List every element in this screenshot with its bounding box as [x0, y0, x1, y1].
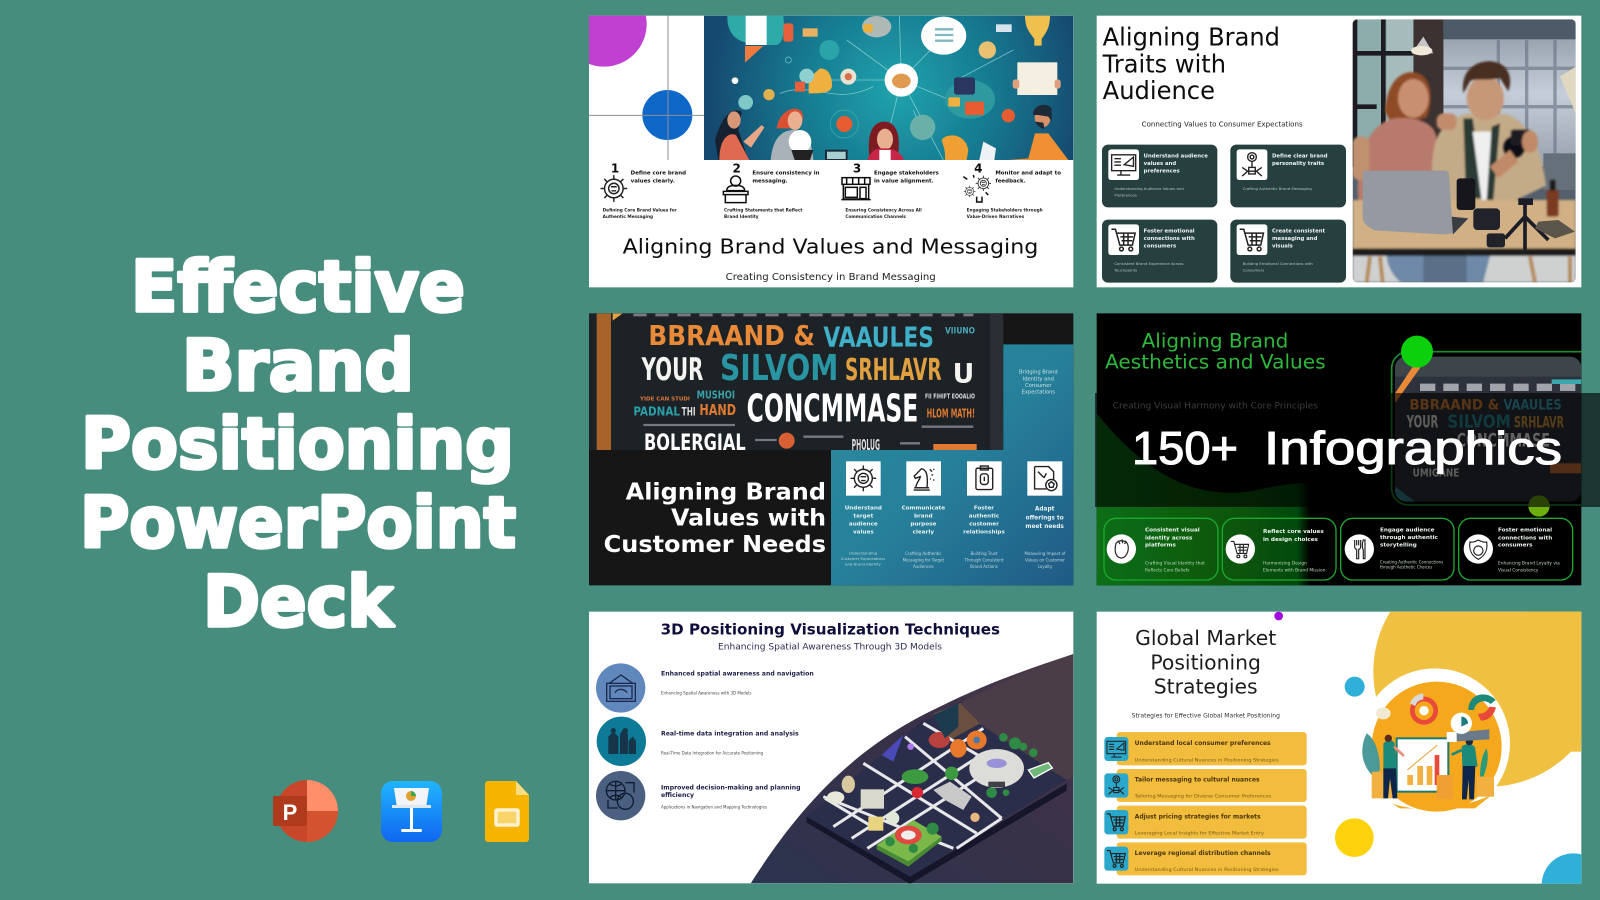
- title: Effective: [131, 246, 465, 328]
- step 4: Engaging Stakeholders through: [967, 208, 1043, 214]
- card: personality traits: [1230, 145, 1346, 207]
- card: emotional connections: [1102, 220, 1217, 283]
- column 4: Measuring Impact of: [1025, 551, 1066, 556]
- row 1: [1104, 732, 1307, 765]
- slide subtitle: Enhancing Spatial Awareness Through 3D Models: [718, 643, 943, 653]
- slide heading: Positioning: [1150, 650, 1261, 674]
- decorative blue dot: [1345, 677, 1365, 697]
- image: chalkboard typography: THI: [682, 405, 696, 419]
- step 4: 4: [974, 161, 983, 175]
- slide heading: Traits with: [1102, 49, 1226, 78]
- teal content panel: Identity and: [1023, 377, 1054, 383]
- column 3: authentic: [969, 514, 999, 520]
- card 2: Reflect core values: [1263, 529, 1324, 535]
- decorative green circle: [1401, 336, 1433, 368]
- teal content panel: Expectations: [1022, 390, 1055, 396]
- slide subtitle: Creating Consistency in Brand Messaging: [726, 272, 936, 283]
- column 4: Values on Customer: [1025, 558, 1065, 563]
- panel: Global Market Positioning Strategies: [1096, 612, 1582, 884]
- card: audience values: Understanding Audience Values and: [1114, 186, 1184, 191]
- donut charts: [1412, 699, 1436, 722]
- card 4: Foster emotional: [1498, 528, 1552, 534]
- decorative yellow dot: [1335, 818, 1374, 857]
- slide heading: Global Market: [1135, 626, 1276, 650]
- table: [1353, 200, 1576, 252]
- column 2: Audiences: [913, 564, 934, 569]
- card 1: platforms: [1145, 543, 1177, 549]
- row 3: [1104, 806, 1307, 839]
- panel: Aligning Brand Values with Customer Needs: [589, 313, 1073, 585]
- card: emotional connections: Touchpoints: [1113, 267, 1137, 272]
- image: chalkboard typography: PADNAL: [633, 405, 680, 419]
- column 4: Loyalty: [1038, 564, 1053, 569]
- image: chalkboard typography: HAND: [699, 401, 736, 419]
- slide heading: Aligning Brand: [1142, 329, 1288, 352]
- card: audience values: preferences: [1144, 169, 1180, 175]
- row 2: Tailoring Messaging for Diverse Consumer Preferences: [1134, 794, 1272, 800]
- column 2: brand: [914, 514, 933, 520]
- slide heading: [1105, 329, 1326, 373]
- faint slide subtitle: Creating Visual Harmony with Core Principles: [1113, 402, 1318, 412]
- card: emotional connections: Consistent Brand Experience Across: [1114, 261, 1183, 266]
- slide heading: 3D Positioning Visualization Techniques: [661, 620, 1000, 638]
- card: personality traits: Crafting Authentic Brand Messaging: [1243, 186, 1312, 191]
- card 4: [1459, 518, 1573, 580]
- card: audience values: Preferences: [1114, 192, 1137, 197]
- slide heading: [604, 477, 826, 558]
- image frame: CONCMMASE: [1457, 431, 1550, 452]
- icon: Keynote: [381, 781, 442, 842]
- cameras and tripod: [1457, 178, 1475, 210]
- card: emotional connections: connections with: [1144, 236, 1195, 242]
- title: Deck: [203, 561, 394, 643]
- slide subtitle: Connecting Values to Consumer Expectations: [1142, 119, 1303, 128]
- step 1: [600, 161, 686, 220]
- panel: Aligning Brand Aesthetics and Values: [1097, 313, 1600, 585]
- slide heading: Aligning Brand: [626, 477, 826, 505]
- card: audience values: values and: [1144, 161, 1176, 167]
- title: Positioning: [81, 403, 514, 485]
- slide heading: Customer Needs: [604, 530, 826, 558]
- step 3: Ensuring Consistency Across All: [845, 208, 922, 214]
- step 2: [723, 161, 820, 220]
- slide heading: Strategies: [1154, 675, 1258, 699]
- image: chalkboard typography: YOUR: [641, 352, 703, 388]
- icon: Google Slides: [485, 781, 529, 842]
- card: audience values: [1102, 145, 1217, 207]
- card 3: Creating Authentic Connections: [1380, 559, 1443, 564]
- step 3: in value alignment.: [874, 179, 934, 185]
- column 2: Communicate: [902, 506, 945, 512]
- image: chalkboard typography: VIIUNO: [945, 326, 975, 336]
- card 2: in design choices: [1263, 537, 1319, 543]
- plant: [1480, 748, 1488, 777]
- item 2: Real-Time Data Integration for Accurate Positioning: [661, 750, 763, 755]
- card 2: Elements with Brand Mission: [1263, 568, 1326, 574]
- decorative purple circle: [589, 16, 647, 67]
- card: consistent messaging: Consumers: [1243, 267, 1264, 272]
- row 1: Understanding Cultural Nuances in Positioning Strategies: [1135, 757, 1279, 763]
- decorative shapes: [1373, 612, 1582, 884]
- item 3: [596, 771, 801, 820]
- step 1: 1: [611, 161, 619, 175]
- card 4: Visual Consistency: [1498, 568, 1539, 574]
- column 1: Understanding: [849, 550, 878, 555]
- column 2: clearly: [913, 529, 934, 535]
- card 3: Engage audience: [1380, 528, 1435, 534]
- image: chalkboard typography: BBRAAND &: [648, 319, 815, 352]
- callout: 150+ Infographics: Infographics: [1264, 422, 1562, 474]
- person 5: [1008, 133, 1068, 160]
- column 3: Through Consistent: [964, 558, 1004, 563]
- illustration: isometric city: [751, 654, 1073, 884]
- column 3: customer: [969, 521, 999, 527]
- decorative olive circle: [1528, 495, 1550, 517]
- item 3: Applications in Navigation and Mapping Technologies: [661, 805, 767, 810]
- image: chalkboard typography: HLOM MATH!: [927, 406, 975, 420]
- step 3: [841, 161, 939, 220]
- slide heading: [1102, 23, 1280, 105]
- card: consistent messaging: [1230, 220, 1346, 283]
- step 4: feedback.: [995, 179, 1026, 185]
- card 4: Enhancing Brand Loyalty via: [1498, 560, 1560, 566]
- title: Brand: [182, 325, 414, 407]
- slide heading: Audience: [1103, 76, 1215, 105]
- step 4: Value-Driven Narratives: [967, 214, 1025, 220]
- panel: 3D Positioning Visualization Techniques: [589, 612, 1073, 884]
- card: emotional connections: consumers: [1144, 244, 1176, 250]
- image frame: SRHLAVR: [1514, 412, 1564, 431]
- column 1: [841, 461, 885, 567]
- card: consistent messaging: Create consistent: [1272, 228, 1325, 234]
- step 4: Monitor and adapt to: [995, 171, 1061, 177]
- step 2: Ensure consistency in: [752, 171, 820, 177]
- green glow: [1097, 413, 1420, 585]
- image: chalkboard typography: [589, 313, 1003, 456]
- step 1: values clearly.: [631, 179, 675, 185]
- left figure: [1383, 740, 1397, 770]
- telescope: [1447, 729, 1489, 742]
- callout: 150+ Infographics: 150+: [1132, 422, 1238, 474]
- card 2: [1222, 518, 1336, 580]
- teal content panel: [831, 344, 1073, 585]
- card: consistent messaging: messaging and: [1272, 236, 1318, 242]
- overlay band: [1095, 393, 1600, 507]
- slide heading: Aesthetics and Values: [1105, 350, 1326, 373]
- column 4: meet needs: [1025, 524, 1064, 530]
- column 1: target: [853, 514, 874, 520]
- image: chalkboard typography: PHOLUG: [852, 437, 880, 454]
- card 3: through Aesthetic Choices: [1380, 564, 1432, 569]
- card: personality traits: Define clear brand: [1272, 153, 1328, 159]
- illustration: analysts with chart: [1362, 682, 1502, 812]
- column 4: Adapt: [1035, 507, 1055, 513]
- image frame: SILVOM: [1447, 411, 1511, 432]
- step 2: messaging.: [752, 179, 788, 185]
- column 3: Foster: [974, 506, 994, 512]
- image frame: BBRAAND &: [1409, 397, 1499, 413]
- step 3: 3: [853, 161, 861, 175]
- column 3: Brand Actions: [970, 564, 998, 569]
- image: chalkboard typography: SILVOM: [720, 348, 838, 389]
- item 2: Real-time data integration and analysis: [661, 731, 799, 738]
- callout: 150+ Infographics: [1132, 422, 1562, 474]
- card: audience values: Understand audience: [1144, 153, 1208, 159]
- card 3: storytelling: [1380, 542, 1417, 548]
- column 2: Messaging for Target: [903, 558, 945, 563]
- item 1: Enhanced spatial awareness and navigation: [661, 671, 814, 678]
- column 3: relationships: [963, 529, 1005, 535]
- image frame: [1392, 352, 1600, 505]
- image: chalkboard typography: CONCMMASE: [747, 387, 918, 432]
- card 4: connections with: [1498, 535, 1552, 541]
- step 1: Defining Core Brand Values for: [603, 208, 678, 214]
- card 2: Harmonizing Design: [1263, 560, 1307, 566]
- right figure: [1462, 744, 1478, 767]
- panel: Aligning Brand Traits with Audience: [1097, 16, 1581, 287]
- icon: PowerPoint: [273, 780, 338, 842]
- card 4: consumers: [1498, 543, 1533, 549]
- image: chalkboard typography: VAAULES: [823, 321, 934, 354]
- row 3: Leveraging Local Insights for Effective Market Entry: [1135, 830, 1264, 836]
- item 1: Enhancing Spatial Awareness with 3D Models: [661, 691, 751, 696]
- column 3: [963, 461, 1005, 569]
- step 3: Engage stakeholders: [874, 171, 939, 177]
- image: chalkboard typography: SRHLAVR: [845, 353, 942, 388]
- row 3: Adjust pricing strategies for markets: [1135, 813, 1261, 820]
- slide heading: [1135, 626, 1276, 699]
- teal content panel: Bridging Brand: [1019, 370, 1058, 376]
- card 3: through authentic: [1380, 535, 1438, 541]
- slide subtitle: Strategies for Effective Global Market Positioning: [1132, 712, 1280, 719]
- panel: Aligning Brand Values and Messaging: [589, 16, 1074, 288]
- column 2: [902, 461, 945, 569]
- card 1: Crafting Visual Identity that: [1145, 560, 1205, 566]
- step 2: Crafting Statements that Reflect: [724, 208, 802, 214]
- title: PowerPoint: [80, 482, 516, 564]
- item 2: [597, 717, 799, 766]
- card 3: [1341, 518, 1454, 580]
- step 4: [963, 161, 1061, 220]
- title: [80, 246, 516, 643]
- woman: [1385, 72, 1431, 127]
- person 1: [715, 110, 748, 160]
- item 3: efficiency: [661, 792, 694, 799]
- card: emotional connections: Foster emotional: [1144, 228, 1195, 234]
- item 3: Improved decision-making and planning: [661, 785, 801, 792]
- row 1: Understand local consumer preferences: [1135, 740, 1271, 747]
- teal content panel: Consumer: [1025, 383, 1052, 389]
- image: chalkboard typography: U: [953, 359, 974, 390]
- row 4: Understanding Cultural Nuances in Positioning Strategies: [1135, 867, 1279, 873]
- column 1: Customer Expectations: [841, 556, 885, 561]
- icon: PowerPoint: P: [283, 800, 297, 825]
- item 1: [596, 663, 814, 713]
- column 2: purpose: [910, 521, 936, 527]
- card: consistent messaging: visuals: [1272, 244, 1293, 250]
- image frame: YOUR: [1406, 412, 1438, 431]
- decorative purple dot: [1274, 612, 1283, 620]
- step 1: Define core brand: [631, 171, 686, 177]
- card 1: Consistent visual: [1145, 528, 1200, 534]
- image frame: VAAULES: [1503, 397, 1562, 413]
- card: consistent messaging: Building Emotional Connections with: [1243, 261, 1313, 266]
- column 1: audience: [849, 521, 878, 527]
- slide heading: Aligning Brand Values and Messaging: [623, 234, 1038, 258]
- step 2: Brand Identity: [724, 214, 759, 220]
- step 2: 2: [732, 161, 741, 175]
- column 2: Crafting Authentic: [905, 551, 942, 556]
- image: chalkboard typography: FII FIHIFT EOOALIO: [925, 392, 975, 400]
- row 4: Leverage regional distribution channels: [1135, 850, 1271, 857]
- column 4: [1025, 461, 1066, 569]
- column 3: Building Trust: [970, 551, 998, 556]
- card: personality traits: personality traits: [1272, 161, 1324, 167]
- slide heading: Values with: [671, 504, 826, 532]
- step 1: Authentic Messaging: [603, 214, 653, 220]
- column 1: values: [853, 529, 874, 535]
- column 1: Understand: [845, 506, 882, 512]
- slide heading: Aligning Brand: [1103, 23, 1280, 52]
- person 3: [869, 122, 899, 157]
- photo: couple at desk: [1353, 19, 1576, 282]
- illustration: team and network: [704, 16, 1073, 160]
- column 4: offerings to: [1026, 515, 1064, 521]
- image: chalkboard typography: BOLERGIAL: [644, 431, 746, 456]
- image frame: UMIGANE: [1413, 467, 1459, 480]
- card 1: identity across: [1145, 535, 1193, 541]
- card 1: [1104, 518, 1218, 580]
- row 2: Tailor messaging to cultural nuances: [1135, 777, 1260, 784]
- row 2: [1104, 769, 1307, 802]
- image: chalkboard typography: MUSHOI: [697, 388, 735, 401]
- man: [1432, 114, 1546, 200]
- step 3: Communication Channels: [845, 214, 906, 220]
- laptop: [1363, 171, 1453, 234]
- decorative blue circle: [642, 90, 692, 140]
- image: chalkboard typography: YIDE CAN STUDI: [639, 397, 690, 403]
- card 1: Reflects Core Beliefs: [1145, 568, 1190, 574]
- person 4: [942, 135, 968, 160]
- person 2: [777, 109, 803, 128]
- row 4: [1104, 842, 1307, 875]
- column 1: and Brand Identity: [845, 562, 882, 567]
- bottle: [1547, 190, 1559, 217]
